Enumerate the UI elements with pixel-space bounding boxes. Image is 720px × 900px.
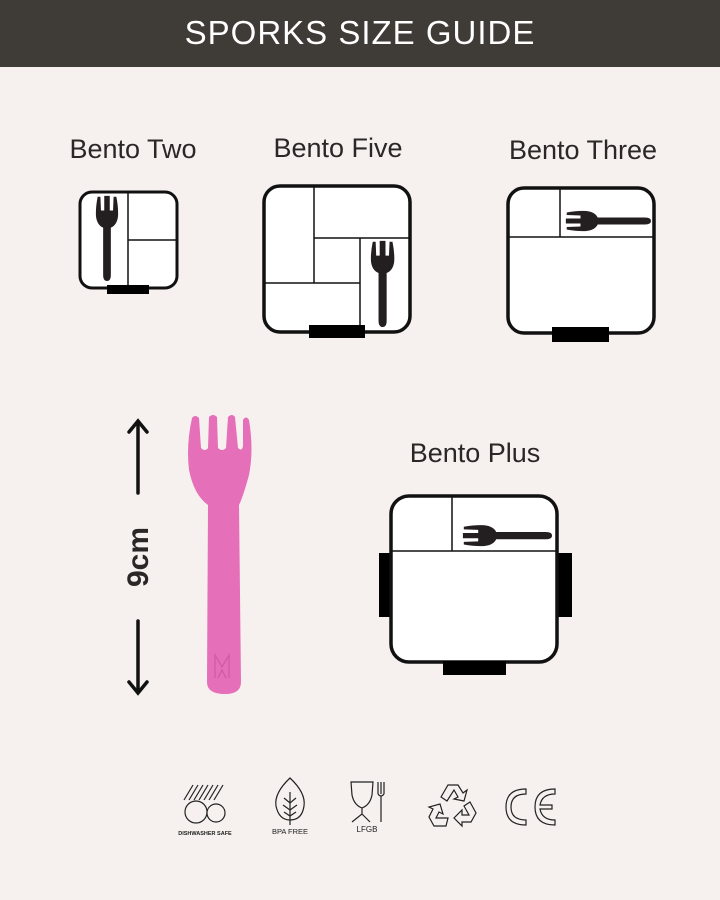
label: Bento Three: Bento Three [509, 135, 657, 165]
bento three box [508, 188, 654, 342]
icon: dishwasher safe [178, 785, 232, 837]
icon: LFGB food safe: LFGB [357, 825, 377, 834]
header bar [0, 0, 720, 67]
measurement label 9cm: 9cm [122, 527, 155, 587]
spork icon [566, 211, 651, 231]
icon: CE mark [506, 789, 555, 825]
label: Bento Five: Bento Five [273, 133, 403, 163]
bento plus box [379, 496, 572, 675]
bento five box [264, 186, 410, 338]
spork icon [96, 196, 118, 281]
arrow up [129, 421, 147, 493]
bento two box [80, 192, 177, 294]
icon: BPA free: BPA FREE [272, 827, 308, 836]
arrow down [129, 621, 147, 693]
icon: LFGB food safe [351, 782, 384, 834]
label: Bento Plus: Bento Plus [410, 438, 540, 468]
spork icon [371, 241, 394, 327]
spork icon [463, 525, 552, 546]
icon: BPA free [272, 778, 308, 836]
label: Bento Two: Bento Two [69, 134, 197, 164]
icon: recycle [429, 785, 476, 826]
title: SPORKS SIZE GUIDE [185, 14, 535, 51]
pink spork [188, 415, 252, 694]
icon: dishwasher safe: DISHWASHER SAFE [178, 831, 232, 837]
